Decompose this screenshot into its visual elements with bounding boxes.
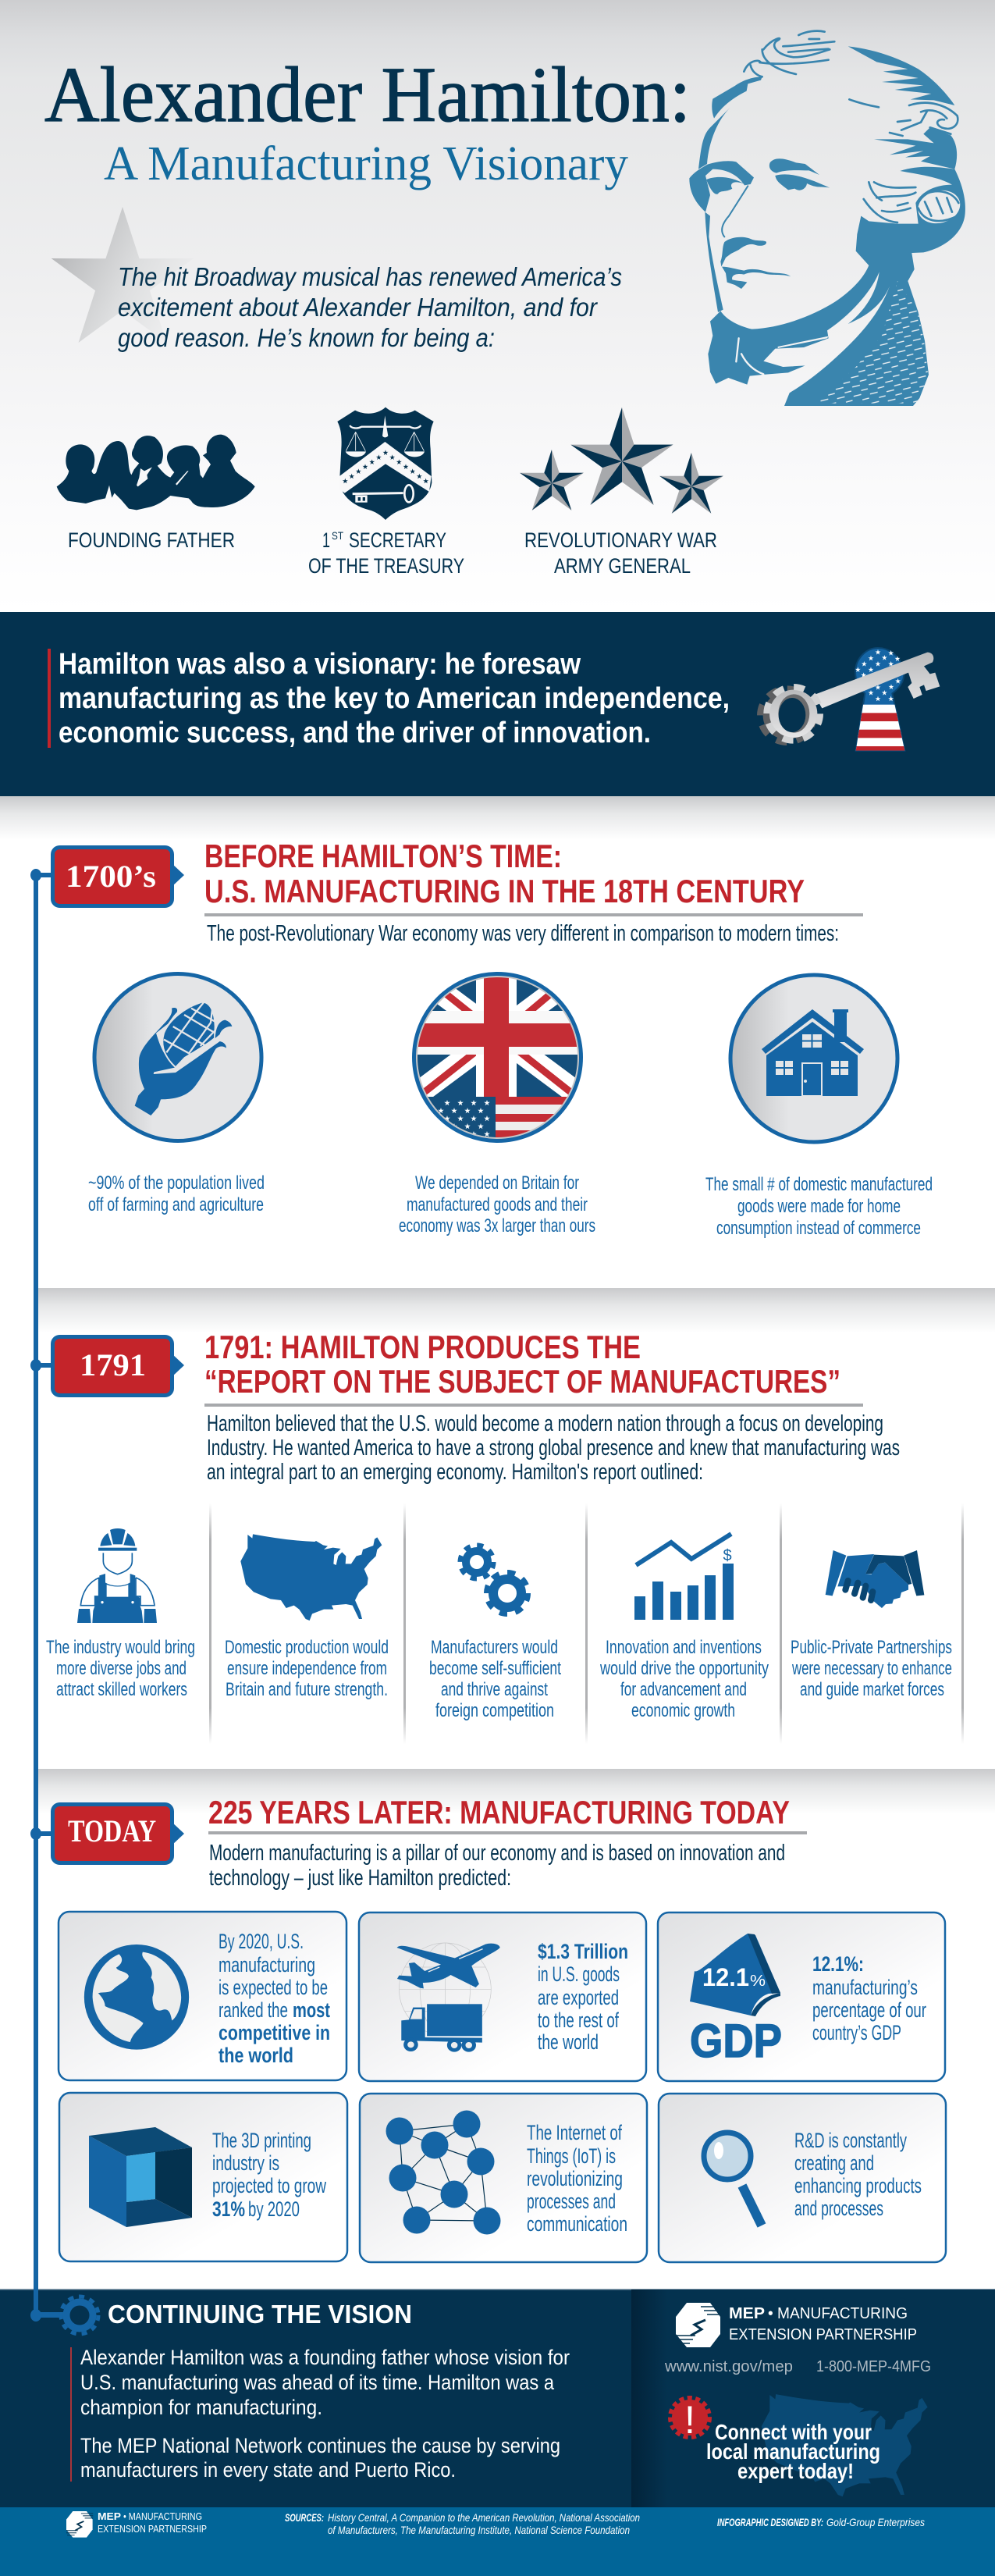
intro text: The hit Broadway musical has renewed America’s [118,262,622,291]
subtitle: A Manufacturing Visionary [104,137,628,190]
panel: research and development card: and processes [794,2197,883,2220]
panel: 3D printing card: The 3D printing [212,2129,311,2152]
decorative shadow below banner [0,796,995,840]
caption: partnerships: and guide market forces [800,1679,944,1700]
intro text: excitement about Alexander Hamilton, and for [118,293,599,322]
icon: network [386,2111,501,2234]
panel: research and development card: creating and [794,2151,874,2175]
panel: internet of things card: revolutionizing [527,2167,623,2190]
panel: internet of things card [360,2094,647,2262]
caption: farming: ~90% of the population lived [88,1172,265,1194]
call to action: Connect with your [715,2420,872,2444]
panel: visionary banner: Hamilton was also a visionary: he foresaw [59,648,581,681]
caption: independence [225,1637,389,1700]
panel: exports card: to the rest of [538,2008,619,2032]
icon: GDP slice: 12.1 [702,1963,749,1991]
icon: GDP slice: GDP [690,2015,782,2067]
panel: internet of things card: The Internet of [527,2121,622,2144]
call to action: expert today! [737,2459,854,2483]
footer body text: manufacturers in every state and Puerto Rico. [80,2458,456,2482]
caption: self-sufficient: foreign competition [435,1700,554,1721]
caption: diverse jobs [46,1637,195,1700]
call to action: local manufacturing [706,2439,880,2464]
panel: GDP card: country’s GDP [812,2021,901,2044]
panel: visionary banner [0,612,995,796]
caption: domestic goods: consumption instead of commerce [716,1218,921,1239]
sources: History Central, A Companion to the American Revolution, National Association [328,2511,640,2524]
footer body text: champion for manufacturing. [80,2396,322,2419]
caption: self-sufficient [429,1637,561,1721]
panel: exports card [359,1912,646,2081]
panel: GDP card: 12.1%: [812,1952,864,1976]
caption: Britain: economy was 3x larger than ours [399,1215,595,1236]
caption: diverse jobs: attract skilled workers [56,1679,187,1700]
sources: SOURCES: [285,2511,324,2524]
panel: research and development card: R&D is constantly [794,2129,907,2152]
heading: 1791 report: 1791: HAMILTON PRODUCES THE [204,1329,641,1365]
icon: GDP slice: % [750,1973,766,1990]
label: first secretary of the treasury: 1 [322,528,330,552]
section: 1791 badge [30,1336,184,1396]
caption: farming: off of farming and agriculture [88,1194,264,1215]
footer body text: U.S. manufacturing was ahead of its time. Hamilton was a [80,2371,555,2394]
sources: of Manufacturers, The Manufacturing Institute, National Science Foundation [328,2524,630,2536]
caption: self-sufficient: Manufacturers would [431,1637,558,1658]
logo: MEP small: • MANUFACTURING [123,2510,202,2522]
icon: house circle [730,975,897,1142]
caption: innovation [599,1637,769,1721]
caption: domestic goods [705,1174,933,1239]
panel: research and development card: enhancing products [794,2174,922,2197]
icon: globe [84,1944,189,2050]
heading: 1791 report [204,1329,840,1400]
logo: MEP small: EXTENSION PARTNERSHIP [98,2523,207,2535]
panel: most competitive card: is expected to be [219,1976,328,1999]
icon: worker [77,1528,157,1623]
intro text [118,262,622,352]
icon: magnifier [704,2133,762,2226]
panel: most competitive card: most [293,1998,330,2022]
icon: footer gear connector [30,2297,98,2334]
panel: internet of things card: processes and [527,2190,616,2213]
caption: innovation: Innovation and inventions [606,1637,762,1658]
section intro text: 1791 [207,1411,900,1485]
panel: visionary banner: economic success, and the driver of innovation. [59,717,651,749]
logo: MEP large [676,2303,917,2347]
panel: blue footer strip [0,2507,995,2576]
panel: 3D printing card: by 2020 [248,2197,300,2221]
caption: Britain [399,1172,595,1236]
header background [0,0,995,612]
icon: growth chart with dollar sign [634,1534,734,1620]
heading: before Hamilton's time [204,838,805,909]
designer credit: Gold-Group Enterprises [826,2516,925,2528]
footer body text: Alexander Hamilton was a founding father whose vision for [80,2346,570,2369]
panel: 3D printing card [59,2093,347,2261]
caption: independence: Domestic production would [225,1637,389,1658]
caption: Britain: We depended on Britain for [415,1172,579,1194]
caption: self-sufficient: become self-sufficient [429,1658,561,1679]
caption: independence: ensure independence from [227,1658,387,1679]
icon: GDP slice [690,1934,782,2067]
contact details [664,2358,931,2375]
panel: exports card: in U.S. goods [538,1962,620,1986]
panel: most competitive card: By 2020, U.S. [219,1930,304,1953]
icon: corn in hand circle [94,974,261,1141]
panel: most competitive card: manufacturing [219,1953,315,1976]
heading: continuing the vision: CONTINUING THE VISION [108,2300,412,2329]
logo: MEP small: MEP [98,2510,121,2522]
heading: 1791 report: “REPORT ON THE SUBJECT OF MANUFACTURES” [204,1363,840,1400]
panel: internet of things card: Things (IoT) is [527,2144,616,2168]
heading: before Hamilton's time: BEFORE HAMILTON’S TIME: [204,838,562,874]
icon: plane, truck and globe [397,1943,500,2050]
decorative shadow section 2 [38,1288,995,1333]
icon: treasury shield [337,407,434,520]
caption: diverse jobs: The industry would bring [46,1637,195,1658]
timeline continuation over footer [34,2264,38,2315]
caption: domestic goods: goods were made for home [737,1196,901,1217]
panel: internet of things card: communication [527,2212,627,2236]
icon: red gear alert [670,2398,709,2442]
caption: Britain: manufactured goods and their [407,1194,588,1215]
timeline line [34,875,38,2316]
portrait of Alexander Hamilton [689,31,965,406]
panel: visionary banner: manufacturing as the key to American independence, [59,682,730,715]
section: 1791 badge: 1791 [80,1347,146,1382]
panel: 3D printing card: 31% [212,2197,245,2221]
label: founding father: FOUNDING FATHER [68,528,235,552]
panel: most competitive card: ranked the [219,1998,288,2022]
icon: red gear alert: ! [684,2398,695,2442]
logo: MEP small [66,2510,207,2538]
label: first secretary of the treasury [308,528,464,578]
section intro text: today: technology – just like Hamilton predicted: [209,1866,511,1891]
section intro text: today: Modern manufacturing is a pillar of our economy and is based on innovation and [209,1841,785,1866]
panel: 3D printing card: industry is [212,2151,279,2175]
title: Alexander Hamilton: [44,51,691,138]
designer credit: INFOGRAPHIC DESIGNED BY: [717,2516,823,2528]
icon: USA map [240,1534,382,1621]
logo: MEP large: • MANUFACTURING [768,2305,908,2322]
label: revolutionary war army general: REVOLUTIONARY WAR [524,528,717,552]
icon: decorative star behind intro [52,207,194,343]
panel: most competitive card [59,1912,346,2080]
section: 1700s badge [30,848,184,906]
label: first secretary of the treasury: SECRETARY [349,528,446,552]
section: today badge [30,1805,184,1863]
logo: MEP large: EXTENSION PARTNERSHIP [729,2326,917,2343]
icon: handshake [826,1550,924,1608]
logo: MEP large: MEP [729,2305,765,2322]
caption: innovation: economic growth [631,1700,735,1721]
label: first secretary of the treasury: OF THE TREASURY [308,554,464,578]
panel: footer dark background [0,2289,995,2507]
intro text: good reason. He’s known for being a: [118,323,495,352]
caption: diverse jobs: more diverse jobs and [56,1658,187,1679]
caption: self-sufficient: and thrive against [441,1679,548,1700]
icon: British and American flag circle [410,968,585,1144]
icon: 3D cube [89,2127,192,2227]
footer body text [80,2346,570,2482]
icon: gears [460,1546,528,1614]
section intro text: 1791: an integral part to an emerging economy. Hamilton's report outlined: [207,1460,703,1485]
caption: innovation: for advancement and [620,1679,747,1700]
section: 1700s badge: 1700’s [66,859,156,894]
sources [285,2511,640,2536]
panel: most competitive card: the world [219,2044,293,2067]
icon: three general stars [520,407,723,514]
caption: innovation: would drive the opportunity [599,1658,769,1679]
icon: gear key and flag keyhole [760,648,940,752]
caption: independence: Britain and future strength. [226,1679,388,1700]
caption: farming [88,1172,265,1215]
panel: most competitive card: competitive in [219,2021,330,2044]
heading: before Hamilton's time: U.S. MANUFACTURING IN THE 18TH CENTURY [204,873,805,909]
icon: growth chart with dollar sign: $ [723,1547,732,1564]
panel: GDP card: manufacturing’s [812,1976,918,1999]
label: revolutionary war army general [524,528,717,578]
decorative shadow section 3 [38,1769,995,1814]
footer body text: The MEP National Network continues the cause by serving [80,2434,560,2457]
label: first secretary of the treasury: ST [332,529,343,542]
heading: manufacturing today: 225 YEARS LATER: MANUFACTURING TODAY [208,1794,790,1831]
contact details: 1-800-MEP-4MFG [816,2358,931,2375]
call to action [706,2420,880,2483]
panel: GDP card: percentage of our [812,1998,926,2022]
label: revolutionary war army general: ARMY GENERAL [554,554,691,578]
panel: research and development card [659,2094,946,2262]
contact details: www.nist.gov/mep [664,2358,793,2375]
section: today badge: TODAY [68,1813,156,1848]
panel: exports card: are exported [538,1986,619,2009]
panel: exports card: the world [538,2030,599,2054]
panel: GDP card [658,1912,945,2081]
map: ghost USA [762,2394,928,2496]
caption: partnerships [791,1637,952,1700]
panel: 3D printing card: projected to grow [212,2174,326,2197]
panel: exports card: $1.3 Trillion [538,1940,628,1963]
icon: founding fathers silhouettes [57,435,255,510]
section intro text: today [209,1841,785,1891]
